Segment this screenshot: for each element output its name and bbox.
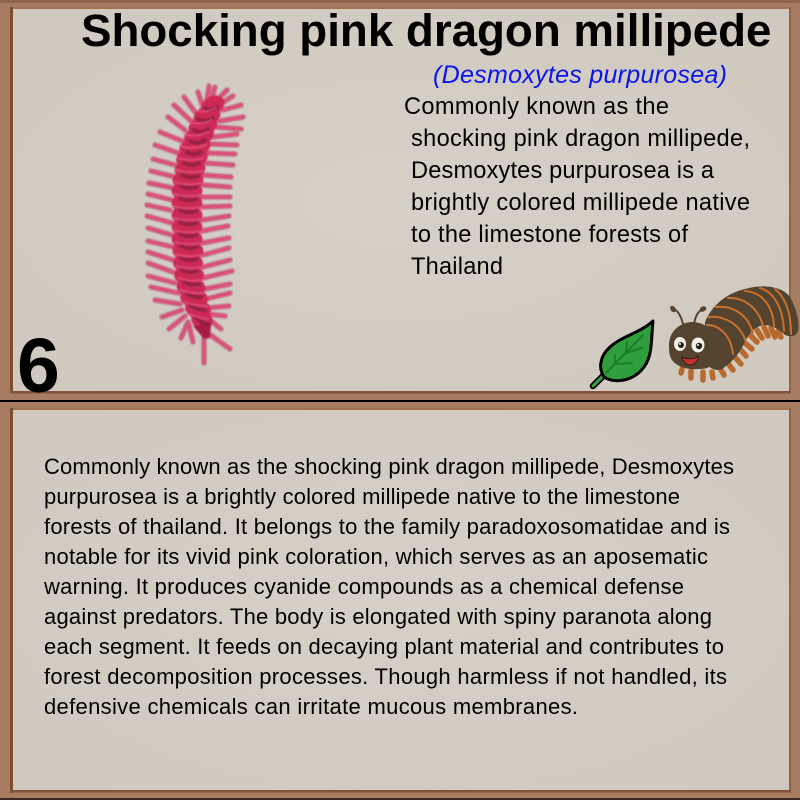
cartoon antennae [674, 309, 703, 324]
icon: cartoon millipede [669, 286, 799, 380]
long description [43, 454, 734, 719]
long description: Commonly known as the shocking pink dragon millipede, Desmoxytes [44, 454, 734, 479]
long description: forest decomposition processes. Though harmless if not handled, its [44, 664, 727, 689]
cartoon mouth [682, 356, 698, 365]
cartoon body [704, 286, 799, 370]
long description: purpurosea is a brightly colored millipede native to the limestone [44, 484, 680, 509]
illustration: pink millipede [147, 86, 243, 363]
short description: Commonly known as the [404, 94, 669, 120]
scientific name: (Desmoxytes purpurosea) [433, 61, 727, 89]
panel: top card [0, 0, 800, 400]
cartoon eyes [674, 337, 704, 352]
card number: 6 [17, 323, 60, 409]
short description [404, 94, 750, 280]
cartoon legs [681, 327, 781, 380]
short description: shocking pink dragon millipede, [411, 126, 750, 152]
panel: bottom card [0, 402, 800, 800]
icon: leaf [593, 321, 653, 386]
long description: against predators. The body is elongated with spiny paranota along [44, 604, 712, 629]
short description: to the limestone forests of [411, 222, 688, 248]
short description: brightly colored millipede native [411, 190, 750, 216]
divider between cards [0, 400, 800, 402]
long description: forests of thailand. It belongs to the family paradoxosomatidae and is [44, 514, 730, 539]
title: Shocking pink dragon millipede [81, 5, 771, 56]
short description: Desmoxytes purpurosea is a [411, 158, 715, 184]
long description: defensive chemicals can irritate mucous membranes. [44, 694, 578, 719]
long description: warning. It produces cyanide compounds as a chemical defense [43, 574, 684, 599]
short description: Thailand [411, 254, 503, 280]
cartoon head [669, 322, 717, 369]
long description: notable for its vivid pink coloration, which serves as an aposematic [44, 544, 708, 569]
cartoon body stripes [707, 288, 791, 354]
long description: each segment. It feeds on decaying plant material and contributes to [44, 634, 724, 659]
